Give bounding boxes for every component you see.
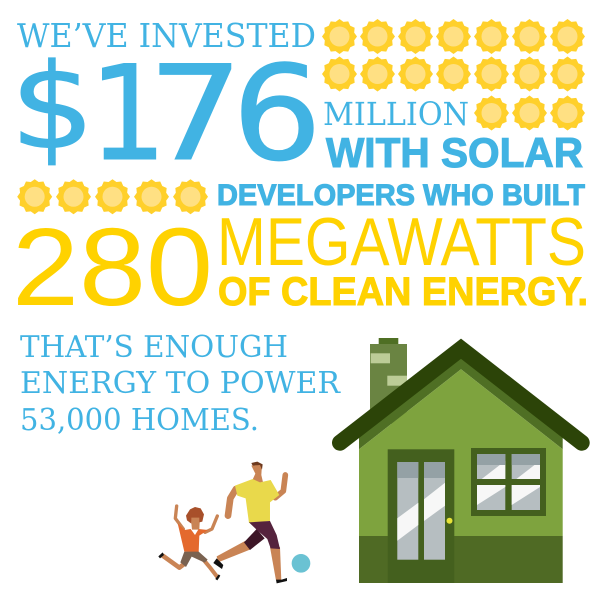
sun icons: first rows (322, 19, 585, 92)
ball (292, 554, 310, 573)
big number: $176: 1 (89, 37, 167, 190)
house wall (359, 369, 563, 536)
text block: enough energy to power homes: THAT’S ENOUGH (20, 330, 288, 365)
text: with solar: WITH SOLAR (326, 129, 583, 176)
text: of clean energy: OF CLEAN ENERGY. (218, 270, 588, 314)
heading: we've invested: WE’VE INVESTED (17, 16, 316, 55)
roof underside band (359, 345, 563, 449)
text: million: MILLION (323, 95, 469, 133)
door (388, 449, 454, 583)
text block: enough energy to power homes: 53,000 HOMES. (20, 403, 259, 438)
lower wall band (359, 536, 563, 583)
illustration: father and child running (158, 462, 310, 583)
big number: $176: $ (10, 38, 95, 176)
big number: $176: 6 (232, 37, 322, 190)
text: developers who built: DEVELOPERS WHO BUILT (217, 179, 585, 212)
text block: enough energy to power homes (20, 330, 341, 438)
child (158, 506, 220, 580)
sun icons: beside million (474, 96, 585, 130)
big number: $176: 7 (148, 37, 244, 190)
big number: $176 (10, 37, 322, 190)
chimney (370, 338, 407, 424)
text block: enough energy to power homes: ENERGY TO POWER (20, 366, 341, 401)
roof (340, 349, 582, 443)
man (213, 462, 287, 583)
illustration: green house (340, 338, 582, 583)
window (471, 448, 546, 516)
big number: 280: 280 (12, 206, 213, 329)
sun icons: row before developers (17, 179, 208, 214)
